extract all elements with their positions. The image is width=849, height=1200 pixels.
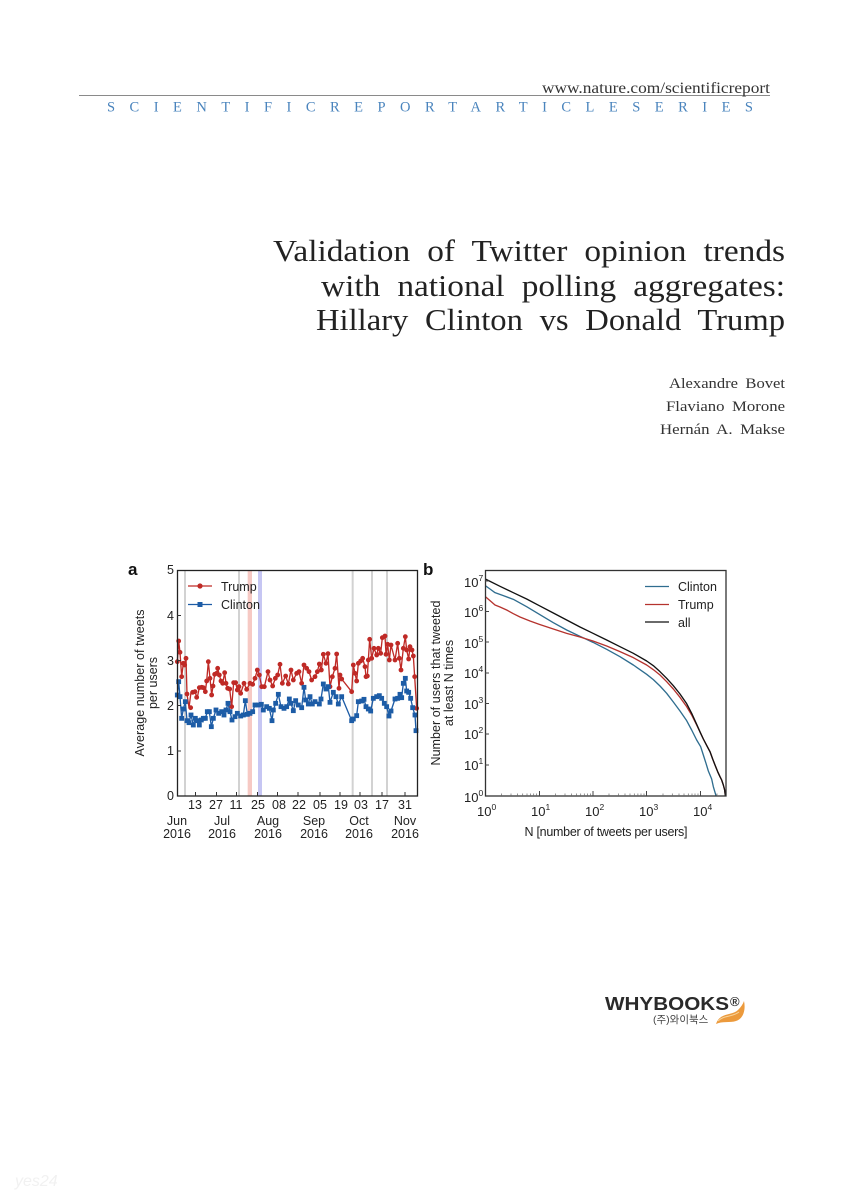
logo korean name: (주)와이북스 [653,1014,709,1026]
title: Validation of Twitter opinion trends [273,234,785,268]
panel b: distribution of tweets per user chart [423,560,726,839]
authors: Hernán A. Makse [660,422,785,438]
x axis labels a: 13 [188,798,202,812]
authors: Alexandre Bovet [669,376,786,392]
x axis labels a: 27 [209,798,223,812]
y axis labels b: 10 [464,697,478,712]
legend b: Trump [678,598,714,612]
x axis labels a: 2016 [391,827,419,841]
x axis labels b: 2 [599,802,604,812]
legend b [645,580,717,630]
panel letter b: b [423,560,433,579]
legend a: Clinton [221,598,260,612]
x axis labels a: 2016 [254,827,282,841]
legend b: all [678,616,691,630]
x axis labels a: 31 [398,798,412,812]
title [273,234,785,337]
x axis labels a: Oct [349,814,369,828]
x axis labels a: 2016 [163,827,191,841]
y axis labels b: 2 [478,725,483,735]
legend b: Clinton [678,580,717,594]
x axis labels b: 4 [707,802,712,812]
y axis title b: at least N times [442,640,456,726]
y axis labels a: 3 [167,654,174,668]
series name: SCIENTIFICREPORTARTICLESERIES [107,100,753,116]
y axis labels b: 10 [464,636,478,651]
y axis labels a: 2 [167,699,174,713]
y axis labels a: 1 [167,744,174,758]
x axis labels a: 03 [354,798,368,812]
legend a [188,580,260,612]
y axis labels b [464,573,483,805]
y axis labels b: 10 [464,758,478,773]
x axis labels a: 2016 [300,827,328,841]
y axis title a: Average number of tweets [133,610,147,756]
all curve [485,579,725,796]
Clinton series [175,676,418,733]
curves b [485,579,725,796]
x axis labels a: 25 [251,798,265,812]
header [79,80,771,116]
x axis labels a: Nov [394,814,417,828]
y axis title a: per users [146,657,160,709]
title: Hillary Clinton vs Donald Trump [316,303,785,337]
axis ticks b [485,581,700,796]
x axis labels b: 10 [531,804,545,819]
x axis labels a: 2016 [208,827,236,841]
x axis labels b: 1 [545,802,550,812]
y axis title b [429,600,456,766]
y axis labels b: 0 [478,788,483,798]
Trump series [175,634,419,710]
y axis labels b: 6 [478,603,483,613]
x axis labels b: 3 [653,802,658,812]
y axis labels a [167,563,174,803]
x axis labels a: 19 [334,798,348,812]
y axis title a [133,610,160,756]
y axis labels b: 4 [478,664,483,674]
y axis labels b: 3 [478,695,483,705]
y axis labels b: 10 [464,605,478,620]
x axis labels a: 2016 [345,827,373,841]
x axis labels b: 10 [693,804,707,819]
y axis labels a: 5 [167,563,174,577]
publisher logo [605,993,745,1026]
x axis labels a [163,798,419,841]
authors: Flaviano Morone [666,399,785,415]
event bands [184,570,388,796]
y axis labels b: 10 [464,727,478,742]
y axis labels b: 1 [478,756,483,766]
y axis labels a: 4 [167,609,174,623]
x axis labels b: 0 [491,802,496,812]
watermark: yes24 [14,1173,58,1190]
x axis labels b: 10 [639,804,653,819]
x axis labels a: 08 [272,798,286,812]
journal url: www.nature.com/scientificreport [542,80,771,97]
axis ticks a [177,616,405,796]
y axis labels b: 10 [464,666,478,681]
x axis labels b: 10 [477,804,491,819]
x axis labels a: Jul [214,814,230,828]
y axis labels b: 10 [464,790,478,805]
y axis labels a: 0 [167,789,174,803]
panel letter a: a [128,560,138,579]
x axis labels a: 11 [230,798,243,812]
panel a: average tweets per user chart [128,560,419,841]
axes frame b [486,570,726,796]
icon: orange swoosh [716,1001,745,1024]
x axis labels a: 22 [292,798,306,812]
y axis labels b: 7 [478,573,483,583]
x axis labels a: Aug [257,814,279,828]
y axis labels b: 5 [478,634,483,644]
Clinton curve [485,586,716,796]
Trump curve [485,597,725,796]
legend a: Trump [221,580,257,594]
x axis labels a: Jun [167,814,187,828]
x axis labels a: 05 [313,798,327,812]
x axis labels a: 17 [375,798,389,812]
title: with national polling aggregates: [321,269,785,303]
authors [660,376,786,438]
y axis title b: Number of users that tweeted [429,600,443,766]
x axis labels b: 10 [585,804,599,819]
y axis labels b: 10 [464,575,478,590]
x axis labels b [477,802,712,819]
axes frame a [178,570,418,796]
registered mark: ® [730,994,740,1009]
logo wordmark: WHYBOOKS [605,993,729,1014]
x axis labels a: Sep [303,814,325,828]
x axis title b: N [number of tweets per users] [524,825,688,839]
